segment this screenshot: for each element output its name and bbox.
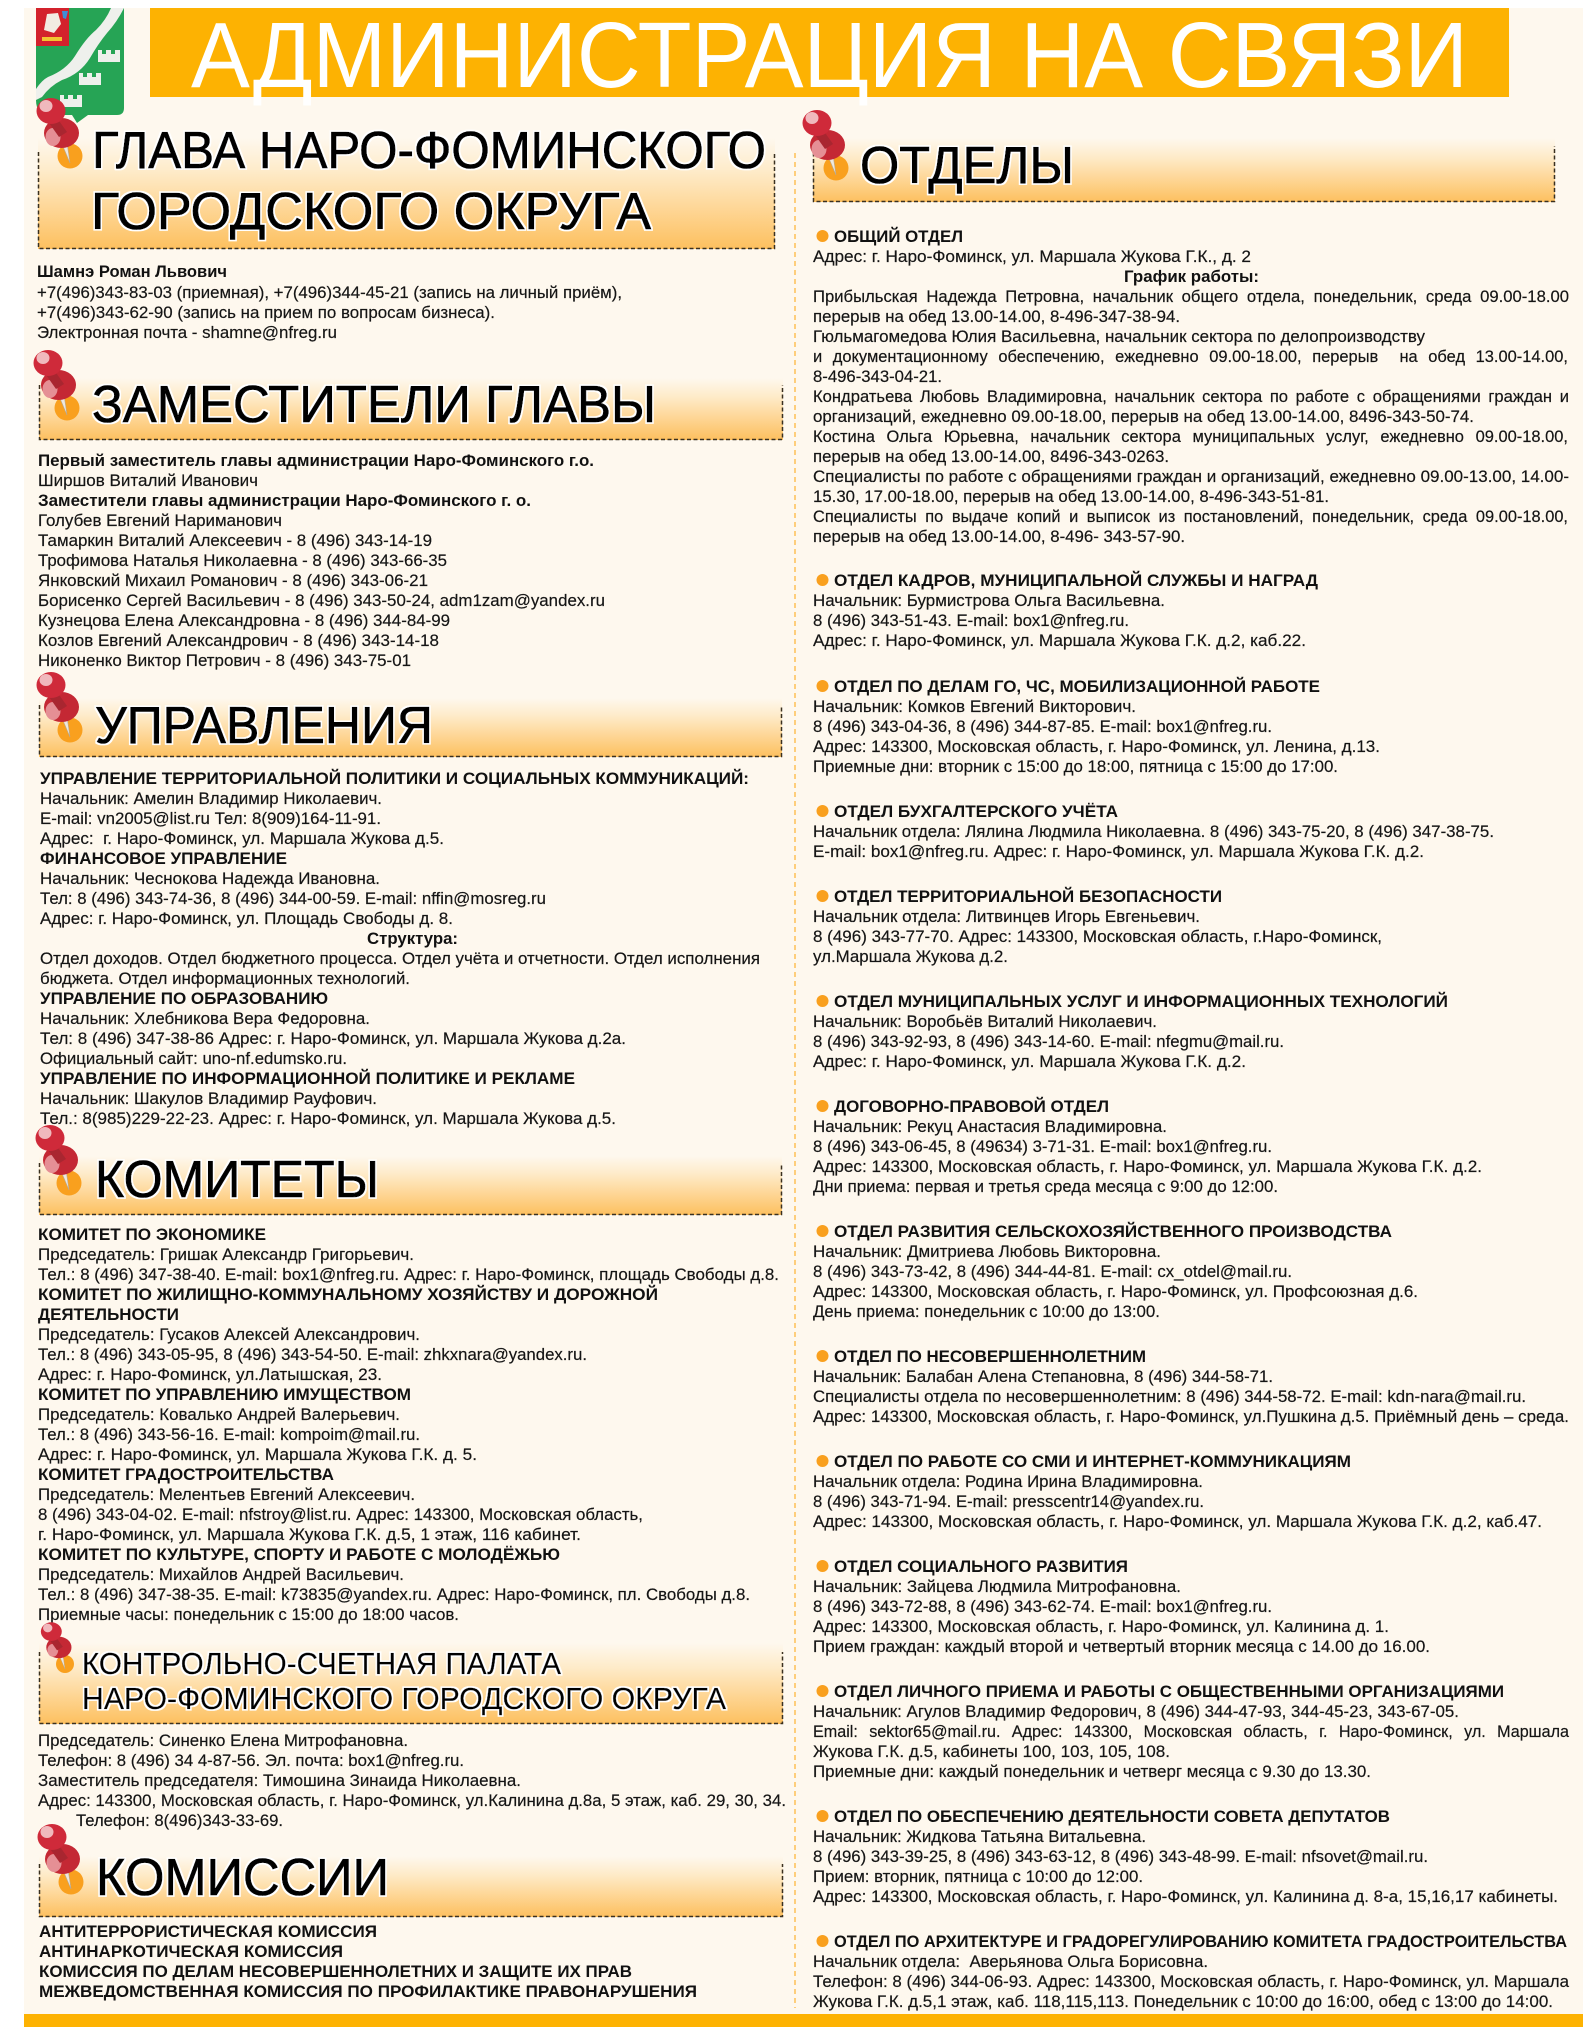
heading: audit chamber: КОНТРОЛЬНО-СЧЕТНАЯ ПАЛАТА xyxy=(82,1646,561,1681)
department: civil defence: Приемные дни: вторник с 15:00 до 18:00, пятница с 15:00 до 17:00. xyxy=(813,758,1338,776)
text block: commissions list: АНТИНАРКОТИЧЕСКАЯ КОМИССИЯ xyxy=(39,1943,343,1961)
text block: head contacts xyxy=(37,263,622,342)
department: general: 15.30, 17.00-18.00, перерыв на обед 13.00-14.00, 8-496-343-51-81. xyxy=(813,488,1329,506)
text block: deputies list: Козлов Евгений Александрович - 8 (496) 343-14-18 xyxy=(38,632,439,650)
department: social development xyxy=(813,1558,1430,1656)
text block: directorates list: Начальник: Хлебникова Вера Федоровна. xyxy=(40,1010,370,1028)
department: personal reception: Начальник: Агулов Владимир Федорович, 8 (496) 344-47-93, 344-45-23, 343-67-05. xyxy=(813,1703,1459,1721)
text block: audit chamber contacts: Телефон: 8(496)343-33-69. xyxy=(76,1812,283,1830)
department: media: Адрес: 143300, Московская область, г. Наро-Фоминск, ул. Маршала Жукова Г.К. д.2, каб.47. xyxy=(813,1513,1542,1531)
department: legal: 8 (496) 343-06-45, 8 (49634) 3-71-31. E-mail: box1@nfreg.ru. xyxy=(813,1138,1272,1156)
department: municipal services and IT: ОТДЕЛ МУНИЦИПАЛЬНЫХ УСЛУГ И ИНФОРМАЦИОННЫХ ТЕХНОЛОГИЙ xyxy=(834,992,1448,1011)
department: architecture xyxy=(813,1933,1570,2011)
heading: head of the district: ГОРОДСКОГО ОКРУГА xyxy=(91,183,651,241)
heading: committees: КОМИТЕТЫ xyxy=(95,1151,379,1209)
department: general: Гюльмагомедова Юлия Васильевна, начальник сектора по делопроизводству xyxy=(813,328,1426,346)
department: social development: Прием граждан: каждый второй и четвертый вторник месяца с 14.00 до 16.00. xyxy=(813,1638,1430,1656)
department: legal: Адрес: 143300, Московская область, г. Наро-Фоминск, ул. Маршала Жукова Г.К. д.2. xyxy=(813,1158,1482,1176)
text block: committees list: Тел.: 8 (496) 347-38-40. E-mail: box1@nfreg.ru. Адрес: г. Наро-Фоминск, площадь Свободы д.8. xyxy=(38,1266,779,1284)
department: personnel: ОТДЕЛ КАДРОВ, МУНИЦИПАЛЬНОЙ СЛУЖБЫ И НАГРАД xyxy=(834,571,1318,590)
text block: deputies list: Никоненко Виктор Петрович - 8 (496) 343-75-01 xyxy=(38,652,411,670)
department: agriculture xyxy=(813,1222,1418,1321)
department: council support xyxy=(813,1808,1558,1906)
department: general: 8-496-343-04-21. xyxy=(813,368,942,386)
department: personnel: Адрес: г. Наро-Фоминск, ул. Маршала Жукова Г.К. д.2, каб.22. xyxy=(813,632,1306,650)
heading: departments: ОТДЕЛЫ xyxy=(860,137,1074,195)
department: civil defence xyxy=(813,677,1380,776)
text block: committees list: Председатель: Ковалько Андрей Валерьевич. xyxy=(38,1406,400,1424)
department: agriculture: День приема: понедельник с 10:00 до 13:00. xyxy=(813,1303,1160,1321)
department: general: Специалисты по работе с обращениями граждан и организаций, ежедневно 09.00-13.00, 14.00- xyxy=(813,468,1569,486)
panel: audit chamber xyxy=(38,1622,786,1830)
text block: directorates list: УПРАВЛЕНИЕ ТЕРРИТОРИАЛЬНОЙ ПОЛИТИКИ И СОЦИАЛЬНЫХ КОММУНИКАЦИЙ: xyxy=(40,769,749,788)
text block: committees list: ДЕЯТЕЛЬНОСТИ xyxy=(38,1306,179,1324)
department: council support: ОТДЕЛ ПО ОБЕСПЕЧЕНИЮ ДЕЯТЕЛЬНОСТИ СОВЕТА ДЕПУТАТОВ xyxy=(834,1808,1390,1826)
text block: committees list: Адрес: г. Наро-Фоминск, ул. Маршала Жукова Г.К. д. 5. xyxy=(38,1446,477,1464)
text block: audit chamber contacts xyxy=(38,1732,786,1830)
department: personal reception: ОТДЕЛ ЛИЧНОГО ПРИЕМА И РАБОТЫ С ОБЩЕСТВЕННЫМИ ОРГАНИЗАЦИЯМИ xyxy=(834,1683,1504,1701)
text block: directorates list xyxy=(40,769,760,1128)
department: architecture: Жукова Г.К. д.5,1 этаж, каб. 118,115,113. Понедельник с 10:00 до 16:00, обед с 13:00 до 14:00. xyxy=(813,1993,1553,2011)
department: minors xyxy=(813,1348,1569,1426)
department: minors: ОТДЕЛ ПО НЕСОВЕРШЕННОЛЕТНИМ xyxy=(834,1348,1146,1366)
text block: head contacts: +7(496)343-83-03 (приемная), +7(496)344-45-21 (запись на личный приём), xyxy=(37,284,622,302)
department: personnel: Начальник: Бурмистрова Ольга Васильевна. xyxy=(813,592,1165,610)
text block: directorates list: УПРАВЛЕНИЕ ПО ОБРАЗОВАНИЮ xyxy=(40,990,328,1008)
text block: head contacts: +7(496)343-62-90 (запись на прием по вопросам бизнеса). xyxy=(37,304,495,322)
text block: committees list: 8 (496) 343-04-02. E-mail: nfstroy@list.ru. Адрес: 143300, Московская область, xyxy=(38,1506,643,1524)
department: general: перерыв на обед 13.00-14.00, 8-496- 343-57-90. xyxy=(813,528,1185,546)
department: personal reception: Жукова Г.К. д.5, кабинеты 100, 103, 105, 108. xyxy=(813,1743,1170,1761)
text block: deputies list: Ширшов Виталий Иванович xyxy=(38,472,258,490)
department: media: Начальник отдела: Родина Ирина Владимировна. xyxy=(813,1473,1203,1491)
department: municipal services and IT: Адрес: г. Наро-Фоминск, ул. Маршала Жукова Г.К. д.2. xyxy=(813,1053,1246,1071)
text block: committees list: КОМИТЕТ ПО ЭКОНОМИКЕ xyxy=(38,1226,266,1244)
department: personal reception xyxy=(813,1683,1570,1781)
heading: commissions: КОМИССИИ xyxy=(96,1849,389,1907)
department: agriculture: ОТДЕЛ РАЗВИТИЯ СЕЛЬСКОХОЗЯЙСТВЕННОГО ПРОИЗВОДСТВА xyxy=(834,1222,1392,1241)
department: general: График работы: xyxy=(1124,268,1259,286)
department: general: организаций, ежедневно 09.00-18.00, перерыв на обед 13.00-14.00, 8496-343-50-74. xyxy=(813,408,1474,426)
department: general: Адрес: г. Наро-Фоминск, ул. Маршала Жукова Г.К., д. 2 xyxy=(813,248,1251,266)
column divider xyxy=(794,153,796,2008)
department: territorial security xyxy=(813,887,1382,966)
heading: deputies xyxy=(34,350,783,440)
department: general: Прибыльская Надежда Петровна, начальник общего отдела, понедельник, среда 09.00-18.00 xyxy=(813,288,1569,306)
text block: committees list xyxy=(38,1226,779,1624)
department: architecture: Начальник отдела: Аверьянова Ольга Борисовна. xyxy=(813,1953,1208,1971)
department: architecture: Телефон: 8 (496) 344-06-93. Адрес: 143300, Московская область, г. Наро-Фоминск, ул. Маршала xyxy=(813,1973,1570,1991)
department: agriculture: Адрес: 143300, Московская область, г. Наро-Фоминск, ул. Профсоюзная д.6. xyxy=(813,1283,1418,1301)
text block: audit chamber contacts: Адрес: 143300, Московская область, г. Наро-Фоминск, ул.Калинина д.8а, 5 этаж, каб. 29, 30, 34. xyxy=(38,1792,786,1810)
text block: deputies list: Первый заместитель главы администрации Наро-Фоминского г.о. xyxy=(38,452,594,470)
department: civil defence: Адрес: 143300, Московская область, г. Наро-Фоминск, ул. Ленина, д.13. xyxy=(813,738,1380,756)
text block: directorates list: Начальник: Чеснокова Надежда Ивановна. xyxy=(40,870,380,888)
department: general xyxy=(813,227,1569,546)
text block: directorates list: Структура: xyxy=(367,930,458,948)
department: general: ОБЩИЙ ОТДЕЛ xyxy=(834,227,963,246)
text block: committees list: КОМИТЕТ ПО ЖИЛИЩНО-КОММУНАЛЬНОМУ ХОЗЯЙСТВУ И ДОРОЖНОЙ xyxy=(38,1285,658,1304)
text block: committees list: КОМИТЕТ ПО КУЛЬТУРЕ, СПОРТУ И РАБОТЕ С МОЛОДЁЖЬЮ xyxy=(38,1546,560,1564)
department: agriculture: 8 (496) 343-73-42, 8 (496) 344-44-81. E-mail: cx_otdel@mail.ru. xyxy=(813,1263,1292,1281)
text block: directorates list: Тел: 8 (496) 343-74-36, 8 (496) 344-00-59. E-mail: nffin@mosreg.ru xyxy=(40,890,546,908)
department: civil defence: Начальник: Комков Евгений Викторович. xyxy=(813,698,1136,716)
text block: directorates list: бюджета. Отдел информационных технологий. xyxy=(40,970,410,988)
text block: committees list: Председатель: Гусаков Алексей Александрович. xyxy=(38,1326,420,1344)
department: territorial security: Начальник отдела: Литвинцев Игорь Евгеньевич. xyxy=(813,908,1200,926)
text block: committees list: Адрес: г. Наро-Фоминск, ул.Латышская, 23. xyxy=(38,1366,382,1384)
text block: directorates list: УПРАВЛЕНИЕ ПО ИНФОРМАЦИОННОЙ ПОЛИТИКЕ И РЕКЛАМЕ xyxy=(40,1069,575,1088)
department: social development: ОТДЕЛ СОЦИАЛЬНОГО РАЗВИТИЯ xyxy=(834,1558,1128,1576)
text block: directorates list: Отдел доходов. Отдел бюджетного процесса. Отдел учёта и отчетности. Отдел исполнения xyxy=(40,950,760,968)
department: legal: ДОГОВОРНО-ПРАВОВОЙ ОТДЕЛ xyxy=(834,1097,1109,1116)
text block: commissions list: КОМИССИЯ ПО ДЕЛАМ НЕСОВЕРШЕННОЛЕТНИХ И ЗАЩИТЕ ИХ ПРАВ xyxy=(39,1963,632,1981)
department: architecture: ОТДЕЛ ПО АРХИТЕКТУРЕ И ГРАДОРЕГУЛИРОВАНИЮ КОМИТЕТА ГРАДОСТРОИТЕЛЬСТВА xyxy=(834,1933,1567,1951)
department: civil defence: 8 (496) 343-04-36, 8 (496) 344-87-85. E-mail: box1@nfreg.ru. xyxy=(813,718,1272,736)
text block: committees list: Тел.: 8 (496) 343-05-95, 8 (496) 343-54-50. E-mail: zhkxnara@yandex.ru. xyxy=(38,1346,587,1364)
department: territorial security: 8 (496) 343-77-70. Адрес: 143300, Московская область, г.Наро-Фоминск, xyxy=(813,928,1382,946)
department: legal xyxy=(813,1097,1482,1196)
text block: audit chamber contacts: Заместитель председателя: Тимошина Зинаида Николаевна. xyxy=(38,1772,521,1790)
text block: committees list: Тел.: 8 (496) 347-38-35. E-mail: k73835@yandex.ru. Адрес: Наро-Фоминск, пл. Свободы д.8. xyxy=(38,1586,750,1604)
text block: directorates list: E-mail: vn2005@list.ru Тел: 8(909)164-11-91. xyxy=(40,810,381,828)
department: general: Кондратьева Любовь Владимировна, начальник сектора по работе с обращениями граждан и xyxy=(813,388,1569,406)
text block: committees list: КОМИТЕТ ПО УПРАВЛЕНИЮ ИМУЩЕСТВОМ xyxy=(38,1386,411,1404)
text block: deputies list: Заместители главы администрации Наро-Фоминского г. о. xyxy=(38,492,531,510)
text block: directorates list: ФИНАНСОВОЕ УПРАВЛЕНИЕ xyxy=(40,850,287,868)
department: legal: Начальник: Рекуц Анастасия Владимировна. xyxy=(813,1118,1167,1136)
department: civil defence: ОТДЕЛ ПО ДЕЛАМ ГО, ЧС, МОБИЛИЗАЦИОННОЙ РАБОТЕ xyxy=(834,677,1320,696)
text block: directorates list: Тел.: 8(985)229-22-23. Адрес: г. Наро-Фоминск, ул. Маршала Жукова д.5. xyxy=(40,1110,616,1128)
text block: head contacts: Электронная почта - shamne@nfreg.ru xyxy=(37,324,337,342)
department: accounting: ОТДЕЛ БУХГАЛТЕРСКОГО УЧЁТА xyxy=(834,803,1118,821)
text block: commissions list xyxy=(39,1923,697,2001)
panel: committees xyxy=(36,1125,782,1624)
heading: head of the district: ГЛАВА НАРО-ФОМИНСКОГО xyxy=(92,122,766,180)
panel: commissions xyxy=(38,1824,783,2001)
panel: departments xyxy=(802,110,1570,2011)
text block: deputies list: Трофимова Наталья Николаевна - 8 (496) 343-66-35 xyxy=(38,552,447,570)
text block: deputies list: Борисенко Сергей Васильевич - 8 (496) 343-50-24, adm1zam@yandex.ru xyxy=(38,592,605,610)
text block: deputies list: Голубев Евгений Нариманович xyxy=(38,512,282,530)
bottom bar xyxy=(24,2014,1583,2027)
text block: directorates list: Начальник: Амелин Владимир Николаевич. xyxy=(40,790,382,808)
department: agriculture: Начальник: Дмитриева Любовь Викторовна. xyxy=(813,1243,1161,1261)
text block: directorates list: Начальник: Шакулов Владимир Рауфович. xyxy=(40,1090,377,1108)
text block: committees list: Председатель: Гришак Александр Григорьевич. xyxy=(38,1246,414,1264)
department: media: 8 (496) 343-71-94. E-mail: presscentr14@yandex.ru. xyxy=(813,1493,1204,1511)
panel: directorates xyxy=(36,672,782,1128)
department: minors: Адрес: 143300, Московская область, г. Наро-Фоминск, ул.Пушкина д.5. Приёмный день – среда. xyxy=(813,1408,1569,1426)
department: municipal services and IT: Начальник: Воробьёв Виталий Николаевич. xyxy=(813,1013,1157,1031)
text block: committees list: Тел.: 8 (496) 343-56-16. E-mail: kompoim@mail.ru. xyxy=(38,1426,420,1444)
text block: audit chamber contacts: Председатель: Синенко Елена Митрофановна. xyxy=(38,1732,408,1750)
department: general: Специалисты по выдаче копий и выписок из постановлений, понедельник, среда 09.00-18.00, xyxy=(813,508,1568,526)
department: territorial security: ул.Маршала Жукова д.2. xyxy=(813,948,1008,966)
department: social development: 8 (496) 343-72-88, 8 (496) 343-62-74. E-mail: box1@nfreg.ru. xyxy=(813,1598,1272,1616)
department: minors: Специалисты отдела по несовершеннолетним: 8 (496) 344-58-72. E-mail: kdn-nara@mail.ru. xyxy=(813,1388,1526,1406)
text block: deputies list xyxy=(38,452,605,670)
heading: audit chamber xyxy=(39,1622,783,1724)
department: accounting: E-mail: box1@nfreg.ru. Адрес: г. Наро-Фоминск, ул. Маршала Жукова Г.К. д.2. xyxy=(813,843,1424,861)
department: general: Костина Ольга Юрьевна, начальник сектора муниципальных услуг, ежедневно 09.00-18.00, xyxy=(813,428,1568,446)
text block: committees list: КОМИТЕТ ГРАДОСТРОИТЕЛЬСТВА xyxy=(38,1466,334,1484)
text block: deputies list: Тамаркин Виталий Алексеевич - 8 (496) 343-14-19 xyxy=(38,532,432,550)
department: social development: Адрес: 143300, Московская область, г. Наро-Фоминск, ул. Калинина д. 1. xyxy=(813,1618,1389,1636)
text block: commissions list: АНТИТЕРРОРИСТИЧЕСКАЯ КОМИССИЯ xyxy=(39,1923,377,1941)
text block: directorates list: Тел: 8 (496) 347-38-86 Адрес: г. Наро-Фоминск, ул. Маршала Жукова д.2а. xyxy=(40,1030,626,1048)
department: general: и документационному обеспечению, ежедневно 09.00-18.00, перерыв на обед 13.00-14.00, xyxy=(813,348,1568,366)
department: media: ОТДЕЛ ПО РАБОТЕ СО СМИ И ИНТЕРНЕТ-КОММУНИКАЦИЯМ xyxy=(834,1453,1351,1471)
department: council support: Прием: вторник, пятница с 10:00 до 12:00. xyxy=(813,1868,1143,1886)
department: general: перерыв на обед 13.00-14.00, 8496-343-0263. xyxy=(813,448,1169,466)
department: general: перерыв на обед 13.00-14.00, 8-496-347-38-94. xyxy=(813,308,1180,326)
department: legal: Дни приема: первая и третья среда месяца с 9:00 до 12:00. xyxy=(813,1178,1278,1196)
department: territorial security: ОТДЕЛ ТЕРРИТОРИАЛЬНОЙ БЕЗОПАСНОСТИ xyxy=(834,887,1222,906)
heading: head of the district xyxy=(36,98,775,249)
panel: head of the district xyxy=(36,98,775,342)
heading: directorates xyxy=(36,672,782,757)
heading: directorates: УПРАВЛЕНИЯ xyxy=(95,697,433,755)
text block: deputies list: Янковский Михаил Романович - 8 (496) 343-06-21 xyxy=(38,572,428,590)
department: municipal services and IT xyxy=(813,992,1448,1071)
department: accounting xyxy=(813,803,1494,861)
text block: commissions list: МЕЖВЕДОМСТВЕННАЯ КОМИССИЯ ПО ПРОФИЛАКТИКЕ ПРАВОНАРУШЕНИЯ xyxy=(39,1983,697,2001)
heading: commissions xyxy=(38,1824,783,1917)
heading: departments xyxy=(802,110,1555,202)
department: personal reception: Приемные дни: каждый понедельник и четверг месяца с 9.30 до 13.30. xyxy=(813,1763,1371,1781)
department: municipal services and IT: 8 (496) 343-92-93, 8 (496) 343-14-60. E-mail: nfegmu@mail.ru. xyxy=(813,1033,1284,1051)
department: minors: Начальник: Балабан Алена Степановна, 8 (496) 344-58-71. xyxy=(813,1368,1273,1386)
heading: deputies: ЗАМЕСТИТЕЛИ ГЛАВЫ xyxy=(92,376,656,434)
text block: directorates list: Официальный сайт: uno-nf.edumsko.ru. xyxy=(40,1050,347,1068)
text block: committees list: г. Наро-Фоминск, ул. Маршала Жукова Г.К. д.5, 1 этаж, 116 кабинет. xyxy=(38,1526,581,1544)
text block: committees list: Приемные часы: понедельник с 15:00 до 18:00 часов. xyxy=(38,1606,459,1624)
panel: deputies xyxy=(34,350,783,670)
department: personal reception: Email: sektor65@mail.ru. Адрес: 143300, Московская область, г. Наро-Фоминск, ул. Маршала xyxy=(813,1723,1570,1741)
heading: committees xyxy=(36,1125,782,1215)
text block: deputies list: Кузнецова Елена Александровна - 8 (496) 344-84-99 xyxy=(38,612,450,630)
text block: committees list: Председатель: Михайлов Андрей Васильевич. xyxy=(38,1566,404,1584)
text block: directorates list: Адрес: г. Наро-Фоминск, ул. Площадь Свободы д. 8. xyxy=(40,910,453,928)
text block: directorates list: Адрес: г. Наро-Фоминск, ул. Маршала Жукова д.5. xyxy=(40,830,444,848)
text block: head contacts: Шамнэ Роман Львович xyxy=(37,263,227,281)
department: council support: 8 (496) 343-39-25, 8 (496) 343-63-12, 8 (496) 343-48-99. E-mail: nfsovet@mail.ru. xyxy=(813,1848,1428,1866)
department: council support: Начальник: Жидкова Татьяна Витальевна. xyxy=(813,1828,1146,1846)
department: personnel: 8 (496) 343-51-43. E-mail: box1@nfreg.ru. xyxy=(813,612,1129,630)
text block: committees list: Председатель: Мелентьев Евгений Алексеевич. xyxy=(38,1486,415,1504)
department: accounting: Начальник отдела: Лялина Людмила Николаевна. 8 (496) 343-75-20, 8 (496) 347-38-75. xyxy=(813,823,1494,841)
department: council support: Адрес: 143300, Московская область, г. Наро-Фоминск, ул. Калинина д. 8-а, 15,16,17 кабинеты. xyxy=(813,1888,1558,1906)
department: social development: Начальник: Зайцева Людмила Митрофановна. xyxy=(813,1578,1181,1596)
icon: coat of arms xyxy=(36,8,124,123)
department: personnel xyxy=(813,571,1318,650)
text block: audit chamber contacts: Телефон: 8 (496) 34 4-87-56. Эл. почта: box1@nfreg.ru. xyxy=(38,1752,464,1770)
heading: audit chamber: НАРО-ФОМИНСКОГО ГОРОДСКОГО ОКРУГА xyxy=(82,1681,726,1716)
department: media xyxy=(813,1453,1542,1531)
title banner: АДМИНИСТРАЦИЯ НА СВЯЗИ xyxy=(191,3,1468,107)
